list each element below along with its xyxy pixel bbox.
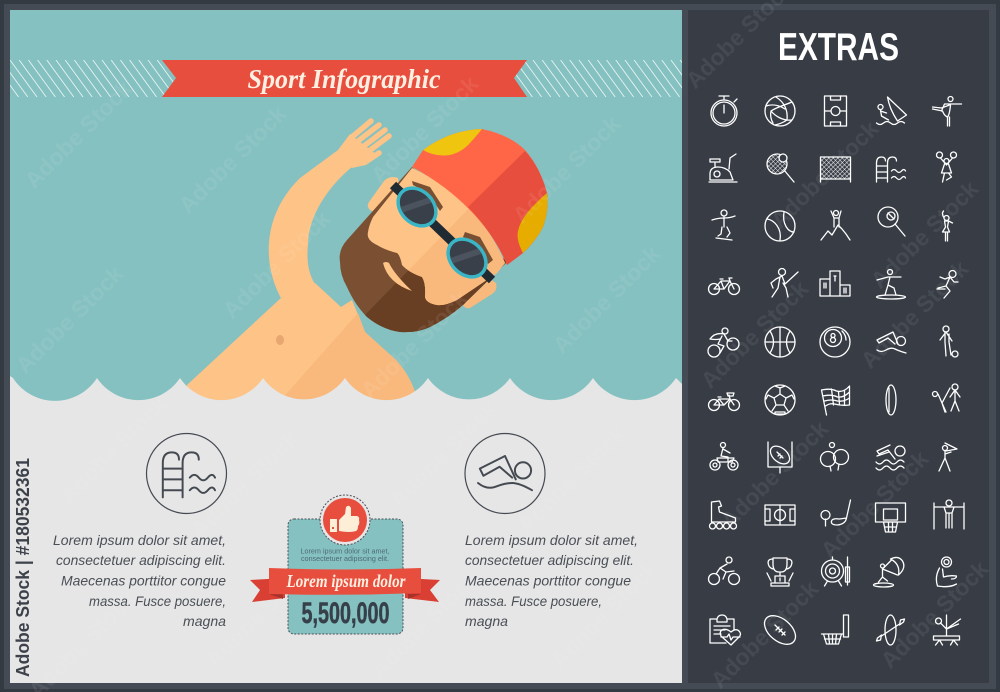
watermarks: Adobe Stock — [865, 175, 983, 293]
icon: tennis racket — [767, 154, 794, 182]
watermarks: Adobe Stock — [384, 395, 502, 513]
card caption: consectetuer adipiscing elit. — [301, 554, 389, 563]
icon: pool ladder in circle — [146, 434, 226, 514]
arm and hand — [269, 121, 389, 300]
watermarks: Adobe Stock — [200, 555, 318, 673]
watermarks: Adobe Stock — [855, 255, 973, 373]
icon: volleyball — [765, 96, 795, 126]
face — [368, 168, 505, 305]
icon: surfboard — [886, 385, 896, 415]
callout card — [250, 495, 440, 634]
icon: racket and ball — [878, 207, 905, 236]
icon: mountain climber — [821, 210, 850, 240]
icon: dancer — [942, 211, 952, 241]
torso — [187, 283, 416, 410]
icon: exercise bike — [709, 154, 737, 182]
badge: thumbs up — [320, 495, 370, 545]
icon: runner — [937, 270, 958, 298]
watermarks: Adobe Stock — [715, 415, 833, 533]
icon: soccer ball — [765, 385, 795, 415]
watermarks: Adobe Stock — [705, 575, 823, 692]
panel: sport illustration — [0, 10, 707, 410]
watermarks: Adobe Stock — [217, 205, 335, 323]
text block: left paragraph — [53, 532, 226, 629]
icon: clipboard with heart — [710, 615, 740, 645]
card caption — [300, 546, 390, 563]
watermarks: Adobe Stock — [54, 390, 172, 508]
text block: right paragraph: magna — [465, 613, 508, 629]
icon: golfer — [939, 443, 957, 471]
icon: kite surfer — [874, 557, 904, 587]
icon: horizontal field — [765, 505, 795, 525]
icon: golf club and ball — [821, 500, 850, 526]
icon: ballet dancer — [932, 96, 962, 126]
text block: left paragraph: consectetuer adipiscing elit. — [56, 552, 226, 568]
icon: bicycle with basket — [708, 393, 740, 410]
icon: basketball hoop — [822, 615, 848, 644]
watermarks: Adobe Stock — [185, 425, 303, 543]
icon: swimmer — [877, 332, 906, 353]
heading: EXTRAS — [778, 26, 899, 69]
icon: skater — [712, 210, 735, 240]
icon: soccer field — [824, 96, 846, 126]
icon: basketball backboard — [876, 503, 906, 532]
text block: right paragraph: consectetuer adipiscing elit. — [465, 552, 634, 568]
icon: football goalposts — [767, 442, 793, 473]
watermarks: Adobe Stock — [19, 75, 137, 193]
title ribbon — [162, 60, 527, 97]
text block: left paragraph: massa. Fusce posuere, — [89, 593, 226, 609]
icon: windsurfer — [876, 97, 906, 124]
text block: right paragraph: massa. Fusce posuere, — [465, 593, 602, 609]
icon: goal net — [820, 157, 850, 182]
text block: left paragraph: magna — [183, 613, 226, 629]
icon: podium — [820, 271, 850, 296]
watermarks: Adobe Stock — [875, 555, 993, 673]
icon: pool ladder — [876, 157, 906, 182]
icon: trophy — [767, 558, 793, 586]
icon: archery target — [822, 557, 850, 586]
watermarks: Adobe Stock — [507, 110, 625, 228]
icon: eight ball — [820, 327, 850, 357]
icon: racing cyclist — [708, 328, 739, 357]
watermarks: Adobe Stock — [173, 100, 291, 218]
mouth — [383, 262, 412, 291]
watermarks: Adobe Stock — [512, 420, 630, 538]
swim cap — [412, 129, 548, 265]
icon: pull-up bar — [934, 500, 964, 529]
card ribbon: Lorem ipsum dolor — [286, 571, 406, 591]
icon: weight lifter arm — [936, 557, 956, 587]
icon: quad bike — [710, 442, 738, 470]
icon: basketball — [765, 327, 795, 357]
icon: ping pong paddles — [820, 442, 848, 471]
watermarks: Adobe Stock — [10, 260, 128, 378]
icon: swimmer with waves — [876, 445, 905, 470]
watermarks: Adobe Stock — [365, 565, 483, 683]
ear: left — [368, 177, 400, 215]
icon: tennis ball — [765, 211, 795, 241]
icon: kayak — [876, 615, 904, 645]
icon: stopwatch — [711, 96, 737, 126]
icon: cheerleader — [936, 152, 956, 182]
icon: fencer — [771, 268, 798, 297]
icon: cyclist — [708, 557, 740, 584]
panel: extras — [708, 26, 964, 650]
text block: right paragraph: Maecenas porttitor congue — [465, 572, 631, 588]
ear: right — [463, 279, 496, 308]
hatch bands — [0, 60, 707, 97]
watermarks: Adobe Stock — [695, 275, 813, 393]
text block: left paragraph: Lorem ipsum dolor sit amet, — [53, 532, 226, 548]
text block: right paragraph: Lorem ipsum dolor sit amet, — [465, 532, 638, 548]
card ribbon — [250, 568, 440, 602]
icon: american football — [759, 610, 801, 650]
beard — [340, 167, 507, 332]
stock id vertical text: Adobe Stock | #180532361 — [13, 458, 33, 677]
icon: surfer — [876, 270, 906, 299]
watermarks: Adobe Stock — [355, 285, 473, 403]
icon: karate — [932, 384, 960, 412]
card background — [288, 519, 403, 634]
card caption: Lorem ipsum dolor sit amet, — [300, 546, 390, 556]
panel: lower grey with wave edge — [10, 376, 682, 683]
watermarks: Adobe Stock — [545, 555, 663, 673]
number: 5,500,000 — [302, 597, 390, 630]
icon: roller skate — [710, 501, 736, 529]
watermarks: Adobe Stock — [365, 70, 483, 188]
text block: left paragraph: Maecenas porttitor congue — [61, 572, 226, 588]
watermarks: Adobe Stock — [815, 445, 933, 563]
watermarks: Adobe Stock — [765, 115, 883, 233]
watermarks: Adobe Stock — [547, 240, 665, 358]
icon: soccer player — [940, 326, 958, 357]
icon: bicycle — [708, 278, 740, 294]
chest mark — [276, 335, 284, 345]
icon: swimmer in circle — [465, 434, 545, 514]
swimmer figure — [187, 121, 548, 410]
icon: gymnast on pommel — [934, 615, 960, 645]
title: Sport Infographic — [248, 64, 441, 94]
eyebrows — [412, 181, 443, 211]
goggles — [388, 178, 496, 287]
text block: right paragraph — [465, 532, 638, 629]
icon: checkered flag — [822, 386, 850, 415]
